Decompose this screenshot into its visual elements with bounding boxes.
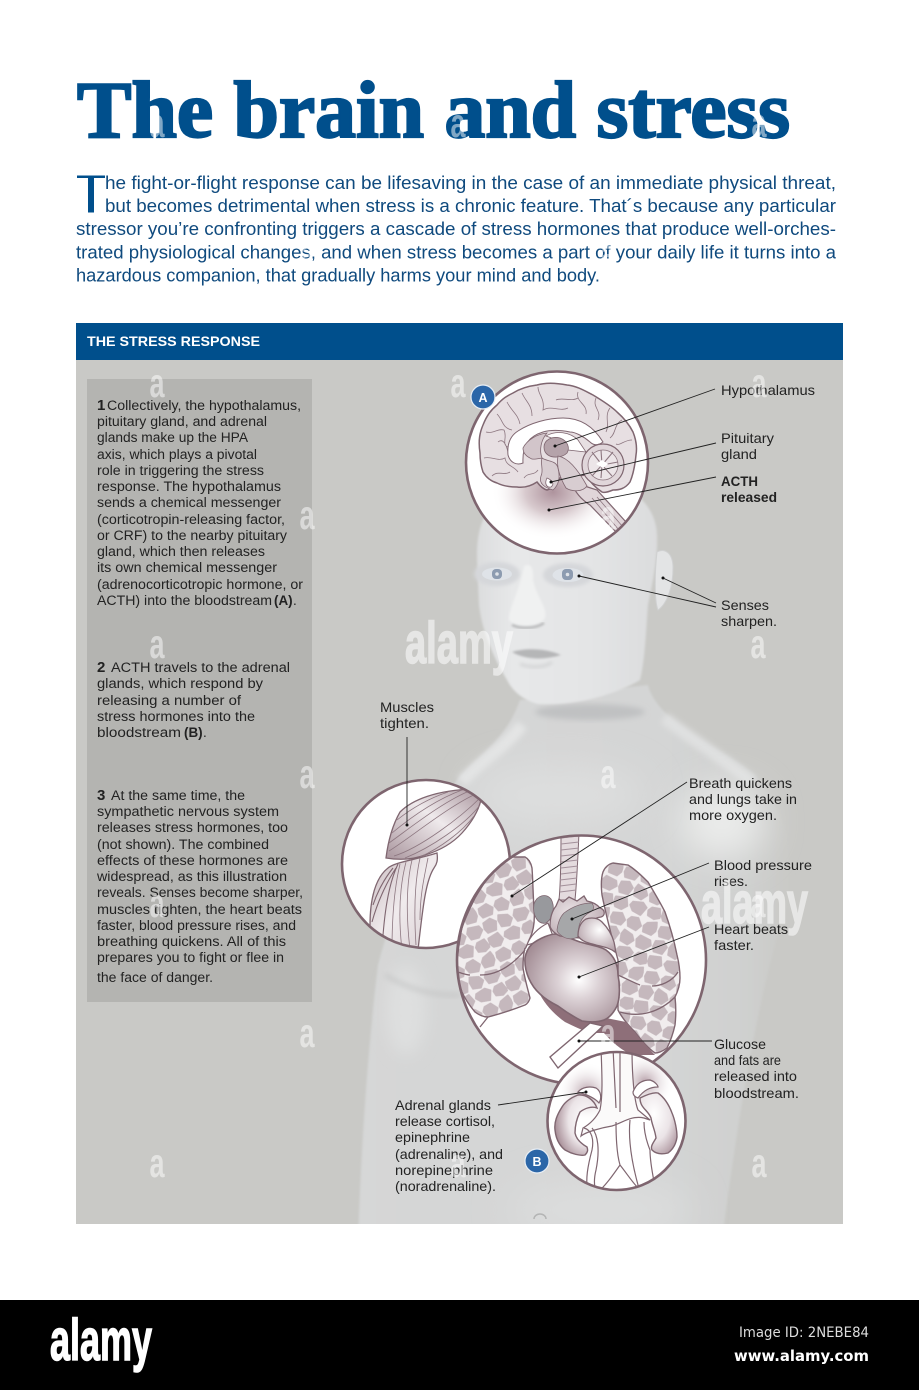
- step 2 text: releasing a number of: [97, 693, 241, 708]
- label: heart beats: [578, 922, 788, 978]
- upper heart: [550, 896, 604, 938]
- upper muscle: [386, 789, 481, 859]
- diaphragm: [540, 996, 655, 1055]
- watermarks: [150, 100, 808, 1186]
- watermarks: a: [300, 751, 315, 797]
- label: glucose: and fats are: [714, 1053, 781, 1068]
- watermarks: a: [752, 1140, 767, 1186]
- white ventricle: [546, 433, 586, 452]
- pulmonary vessel: [534, 896, 553, 923]
- panel: stress response background: [76, 360, 843, 1224]
- watermarks: a: [600, 230, 616, 276]
- step 1 text: [97, 397, 304, 608]
- cerebellum: [582, 444, 624, 486]
- watermarks: a: [450, 360, 466, 406]
- watermarks: a: [300, 1010, 315, 1056]
- watermarks: a: [450, 100, 466, 146]
- right kidney: [640, 1093, 677, 1154]
- eye right: [552, 568, 584, 582]
- step 1 text: ACTH) into the bloodstream: [97, 593, 272, 608]
- step 1 text: its own chemical messenger: [97, 560, 278, 575]
- human body figure: [358, 475, 793, 1240]
- label: glucose: bloodstream.: [714, 1086, 799, 1101]
- cerebrum: [479, 383, 637, 492]
- atrium: [578, 918, 615, 952]
- step 2 text: glands, which respond by: [97, 676, 263, 691]
- intro paragraph: trated physiological changes, and when stress becomes a part of your daily life it turns into a: [76, 242, 837, 262]
- step 3 text: sympathetic nervous system: [97, 804, 279, 819]
- step 3 text: the face of danger.: [97, 970, 213, 985]
- mouth: [512, 649, 561, 658]
- ear: [655, 551, 673, 610]
- step 3 text: faster, blood pressure rises, and: [97, 918, 296, 933]
- intro paragraph: [76, 172, 837, 286]
- vessels: [581, 1048, 650, 1136]
- head: [476, 500, 658, 704]
- white vessel: [527, 923, 553, 945]
- left lung: [456, 857, 534, 1017]
- step 1 text: 1: [97, 397, 105, 414]
- label: heart beats: Heart beats: [714, 922, 788, 937]
- step 1 text: glands make up the HPA: [97, 430, 248, 445]
- intro paragraph: hazardous companion, that gradually harms your mind and body.: [76, 264, 600, 286]
- right lung: [601, 863, 680, 1053]
- label: hypothalamus: [554, 383, 815, 448]
- label: breath quickens: and lungs take in: [689, 792, 797, 807]
- label: breath quickens: more oxygen.: [689, 808, 777, 823]
- watermarks: a: [150, 360, 165, 406]
- torso: [358, 686, 749, 1224]
- label: adrenal glands: (adrenaline), and: [395, 1147, 503, 1162]
- label: breath quickens: [510, 776, 797, 898]
- drop cap: [77, 176, 105, 212]
- intro paragraph: but becomes detrimental when stress is a chronic feature. That´s because any particular: [105, 195, 836, 216]
- nose: [510, 566, 544, 624]
- watermarks: a: [150, 880, 165, 926]
- label: senses sharpen: Senses: [721, 598, 769, 613]
- label: heart beats: faster.: [714, 938, 754, 953]
- step 3 text: [96, 787, 303, 985]
- midbrain and pons: [540, 458, 559, 490]
- step 1 text: sends a chemical messenger: [97, 495, 282, 510]
- title: The brain and stress: [77, 67, 790, 155]
- step 3 text: reveals. Senses become sharper,: [97, 885, 303, 900]
- neck shadow: [535, 704, 645, 720]
- watermarks: alamy: [701, 871, 808, 936]
- footer url: www.alamy.com: [734, 1347, 869, 1365]
- inset: brain: [466, 372, 648, 554]
- label: muscles tighten: [380, 700, 434, 826]
- label: adrenal glands: release cortisol,: [395, 1114, 495, 1129]
- watermarks: a: [300, 230, 315, 276]
- panel: text column: [87, 379, 312, 1002]
- step 1 text: (adrenocorticotropic hormone, or: [97, 577, 304, 592]
- left kidney: [555, 1095, 597, 1155]
- section header bar: THE STRESS RESPONSE: [87, 333, 260, 349]
- step 2 text: bloodstream: [97, 725, 181, 740]
- label: pituitary gland: Pituitary: [721, 431, 774, 446]
- step 3 text: releases stress hormones, too: [97, 820, 288, 835]
- watermarks: a: [752, 100, 767, 146]
- step 2 text: .: [203, 725, 207, 740]
- label: blood pressure: [570, 858, 812, 920]
- step 3 text: At the same time, the: [111, 788, 245, 803]
- intro paragraph: stressor you’re confronting triggers a cascade of stress hormones that produce well-orches-: [76, 218, 836, 239]
- footer logo: alamy: [50, 1308, 152, 1373]
- step 3 text: breathing quickens. All of this: [97, 934, 286, 949]
- label: blood pressure: Blood pressure: [714, 858, 812, 873]
- tube: [550, 1023, 603, 1068]
- label: glucose: released into: [714, 1069, 797, 1084]
- watermarks: a: [752, 360, 767, 406]
- lower muscle: [370, 853, 437, 950]
- step 3 text: effects of these hormones are: [97, 853, 288, 868]
- watermarks: a: [600, 1010, 616, 1056]
- aorta grey: [557, 903, 594, 939]
- badge A: [471, 385, 495, 409]
- label: adrenal glands: [395, 1090, 588, 1194]
- label: adrenal glands: epinephrine: [395, 1130, 470, 1145]
- step 1 text: (corticotropin-releasing factor,: [97, 512, 285, 527]
- step 3 text: 3: [97, 787, 105, 804]
- label: muscles tighten: Muscles: [380, 700, 434, 715]
- label: senses sharpen: [578, 574, 777, 629]
- step 2 text: stress hormones into the: [97, 709, 255, 724]
- inset: chest organs: [456, 832, 706, 1084]
- badge A: A: [478, 391, 488, 405]
- inset: muscle: [342, 780, 510, 950]
- shoulder highlights: [462, 725, 522, 782]
- inset: kidneys: [548, 1048, 686, 1192]
- step 3 text: prepares you to fight or flee in: [97, 950, 284, 965]
- step 1 text: (A): [274, 593, 293, 608]
- label: blood pressure: rises.: [714, 874, 748, 889]
- label: ACTH released: released: [721, 490, 777, 505]
- brainstem: [575, 486, 626, 532]
- step 1 text: axis, which plays a pivotal: [97, 447, 257, 462]
- label: muscles tighten: tighten.: [380, 716, 429, 731]
- pituitary: [546, 478, 553, 487]
- caudate: [523, 433, 547, 459]
- step 1 text: response. The hypothalamus: [97, 479, 281, 494]
- eye socket shading: [474, 562, 520, 586]
- thalamus: [544, 437, 568, 457]
- watermarks: alamy: [405, 611, 513, 676]
- label: adrenal glands: Adrenal glands: [395, 1098, 491, 1113]
- step 2 text: (B): [184, 725, 203, 740]
- step 1 text: Collectively, the hypothalamus,: [107, 398, 301, 413]
- watermarks: a: [450, 1140, 466, 1186]
- watermarks: a: [750, 621, 766, 667]
- adrenal left: [578, 1087, 601, 1103]
- step 1 text: gland, which then releases: [97, 544, 265, 559]
- label: pituitary gland: gland: [721, 447, 757, 462]
- navel: [534, 1214, 546, 1219]
- ACTH release glow: [504, 476, 602, 530]
- badge B: B: [532, 1155, 542, 1169]
- gyri: [484, 387, 632, 478]
- label: pituitary gland: [550, 431, 774, 484]
- heart ventricle: [525, 934, 619, 1022]
- watermarks: a: [150, 621, 165, 667]
- label: adrenal glands: norepinephrine: [395, 1163, 493, 1178]
- step 2 text: 2: [97, 659, 105, 676]
- watermarks: a: [150, 1140, 165, 1186]
- watermarks: a: [600, 492, 616, 538]
- label: ACTH released: ACTH: [721, 474, 758, 489]
- step 1 text: or CRF) to the nearby pituitary: [97, 528, 287, 543]
- watermarks: a: [300, 492, 315, 538]
- intro paragraph: he fight-or-flight response can be lifesaving in the case of an immediate physical threat,: [105, 172, 836, 193]
- label: hypothalamus: Hypothalamus: [721, 383, 815, 398]
- label: breath quickens: Breath quickens: [689, 776, 792, 791]
- eye left: [482, 568, 512, 580]
- step 2 text: ACTH travels to the adrenal: [111, 660, 290, 675]
- step 3 text: muscles tighten, the heart beats: [97, 902, 302, 917]
- watermarks: a: [750, 880, 766, 926]
- label: adrenal glands: (noradrenaline).: [395, 1179, 496, 1194]
- step 1 text: .: [293, 593, 297, 608]
- label: ACTH released: [548, 474, 777, 512]
- step 3 text: widespread, as this illustration: [96, 869, 287, 884]
- watermarks: a: [150, 100, 165, 146]
- label: senses sharpen: sharpen.: [721, 614, 777, 629]
- footer band: [0, 1300, 919, 1390]
- footer image id: Image ID: 2NEBE84: [739, 1325, 869, 1341]
- step 1 text: pituitary gland, and adrenal: [97, 414, 267, 429]
- step 3 text: (not shown). The combined: [97, 837, 269, 852]
- adrenal right: [633, 1080, 658, 1098]
- step 2 text: [97, 659, 290, 740]
- badge B: [525, 1149, 549, 1173]
- trachea: [559, 832, 579, 900]
- watermarks: a: [600, 751, 616, 797]
- corpus callosum crescent: [508, 418, 603, 464]
- label: glucose: [578, 1037, 799, 1101]
- step 1 text: role in triggering the stress: [97, 463, 264, 478]
- label: glucose: Glucose: [714, 1037, 766, 1052]
- section header bar: [76, 323, 843, 360]
